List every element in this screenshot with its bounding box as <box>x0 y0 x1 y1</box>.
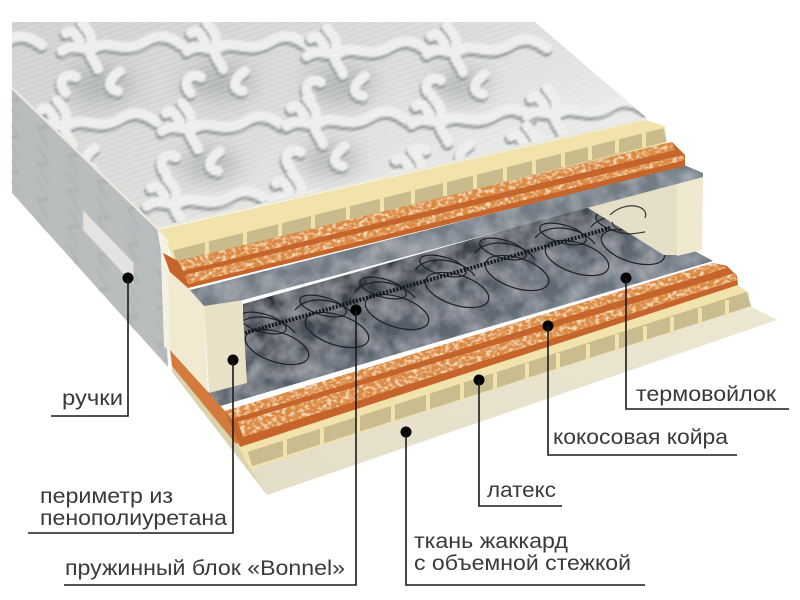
spring block interior on felt <box>208 206 713 409</box>
label: термовойлок: термовойлок <box>636 383 777 406</box>
label: латекс: латекс <box>487 479 556 502</box>
upper coconut coir layers <box>163 142 685 288</box>
label: кокосовая койра <box>542 320 737 455</box>
label: периметр из пенополиуретана <box>28 354 238 533</box>
label: кокосовая койра: кокосовая койра <box>553 426 728 449</box>
label: ткань жаккард с объемной стежкой: с объемной стежкой <box>414 552 631 575</box>
lower left edge strips <box>170 350 267 495</box>
label: ткань жаккард с объемной стежкой: ткань жаккард <box>414 530 568 553</box>
lower fabric sheet <box>172 305 777 495</box>
lower latex layer <box>238 285 749 469</box>
label: периметр из пенополиуретана: периметр из <box>40 485 173 508</box>
top edge piping <box>12 88 647 228</box>
icon: handle <box>83 210 134 284</box>
right foam perimeter block <box>585 176 703 256</box>
left foam perimeter block <box>160 230 247 393</box>
label: ручки <box>51 272 134 416</box>
label: ручки: ручки <box>62 387 123 410</box>
upper latex layer <box>157 120 667 266</box>
upper thermal felt sheet <box>190 165 703 306</box>
label: пружинный блок Bonnel: пружинный блок «Bonnel» <box>65 557 345 580</box>
label: периметр из пенополиуретана: пенополиуретана <box>40 507 227 530</box>
mattress side panel <box>12 88 168 367</box>
label: латекс <box>474 374 562 506</box>
lower coconut coir layers <box>225 263 738 447</box>
quilted top surface <box>12 22 646 226</box>
label: термовойлок <box>620 272 789 409</box>
label: пружинный блок Bonnel <box>64 304 362 585</box>
label: ткань жаккард с объемной стежкой <box>400 426 645 585</box>
